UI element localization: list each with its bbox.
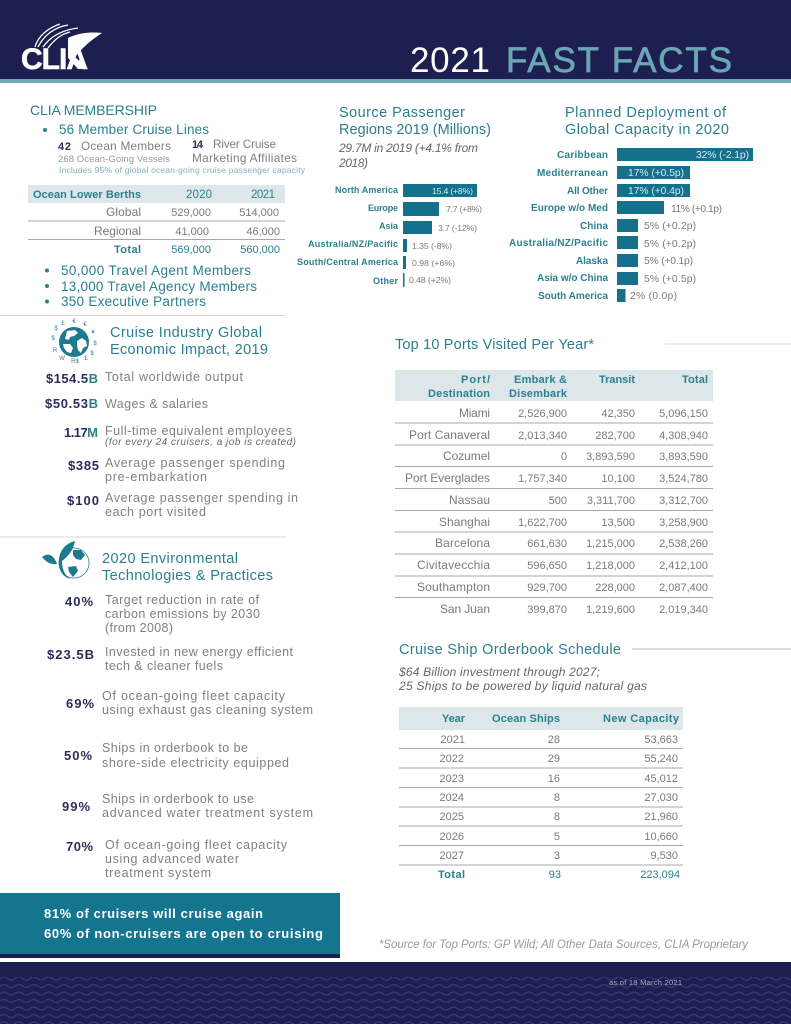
panel: environmental	[42, 541, 313, 880]
table rows: orderbook: 55,240	[644, 753, 678, 765]
table rows: ports: 929,700	[527, 582, 567, 594]
member cruise lines: Marketing Affiliates	[192, 151, 297, 165]
bar: Mediterranean: 17% (+0.5p)	[628, 168, 684, 179]
bar: Mediterranean: Mediterranean	[537, 168, 608, 179]
table rows: ports: 4,308,940	[659, 430, 708, 442]
callout: will cruise again: 60% of non-cruisers are open to cruising	[44, 926, 323, 941]
bar: Caribbean: 32% (-2.1p)	[696, 150, 749, 161]
member cruise lines	[43, 122, 306, 175]
heading: source passenger: Source Passenger	[339, 105, 465, 121]
table rows: ports: 2,526,900	[518, 408, 567, 420]
bar: Asia w/o China: Asia w/o China	[537, 273, 608, 284]
table rows: orderbook: 16	[548, 773, 560, 785]
table: ocean lower berths: Total	[114, 244, 141, 256]
stat: port spending: each port visited	[105, 505, 206, 519]
bar: Caribbean	[557, 148, 753, 161]
stat: port spending: $100	[67, 493, 99, 508]
stat: 69%: Of ocean-going fleet capacity	[102, 689, 286, 703]
bar: All Other	[567, 184, 690, 197]
stat: 50%: Ships in orderbook to be	[102, 741, 248, 755]
table rows: ports: Cozumel	[443, 449, 490, 463]
stat: 70%: using advanced water	[105, 852, 239, 866]
heading: planned deployment: Planned Deployment of	[565, 105, 727, 121]
table rows: ports: 3,524,780	[659, 473, 708, 485]
heading: top 10 ports: Top 10 Ports Visited Per Year*	[395, 337, 594, 353]
table header: ports: Disembark	[509, 388, 568, 400]
icon: globe with currency symbols: W	[59, 356, 65, 362]
table: ocean lower berths: 46,000	[246, 226, 280, 238]
heading: planned deployment: Global Capacity in 2020	[565, 122, 729, 138]
bar: Europe	[368, 202, 482, 216]
stat: pre-embarkation spending: $385	[68, 458, 99, 473]
stat: 69%: using exhaust gas cleaning system	[102, 703, 313, 717]
stat: pre-embarkation spending: Average passenger spending	[105, 456, 285, 470]
table rows: orderbook: 21,960	[644, 811, 678, 823]
bar: China: China	[580, 221, 608, 232]
stat: port spending	[67, 491, 298, 519]
bar: Asia	[379, 221, 477, 234]
table header: ports: Transit	[599, 374, 635, 386]
table header: orderbook: New Capacity	[603, 713, 680, 725]
table rows: orderbook: 2025	[440, 811, 464, 823]
callout: will cruise again: 81% of cruisers will cruise again	[44, 906, 263, 921]
table rows: orderbook: 28	[548, 734, 560, 746]
member cruise lines: 268 Ocean-Going Vessels	[58, 154, 170, 165]
bar: Alaska	[576, 254, 693, 267]
bar: Europe: Europe	[368, 203, 398, 213]
table rows: orderbook: 8	[554, 792, 560, 804]
table rows: ports: Shanghai	[439, 515, 490, 529]
table rows: ports: 596,650	[527, 560, 567, 572]
table rows: ports: 1,218,000	[586, 560, 635, 572]
table rows: ports: Barcelona	[435, 536, 490, 550]
panel: CLIA membership	[28, 102, 306, 309]
icon: globe with currency symbols: ¥	[91, 330, 95, 336]
table: ocean lower berths: 529,000	[171, 207, 211, 219]
icon: globe with currency symbols: $	[93, 341, 97, 347]
bar: Caribbean: Caribbean	[557, 150, 608, 161]
stat: 50%	[64, 741, 289, 770]
subtitle: source passenger: 29.7M in 2019 (+4.1% from	[338, 141, 478, 155]
stat: 40%	[65, 593, 260, 635]
table: ocean lower berths: 2021	[251, 189, 275, 201]
bar: Europe w/o Med: Europe w/o Med	[531, 203, 608, 214]
table rows: ports: 399,870	[527, 604, 567, 616]
logo: CLIA	[21, 24, 102, 76]
heading: environmental: 2020 Environmental	[102, 551, 238, 567]
table header: ports: Destination	[428, 388, 490, 400]
bar: North America: North America	[335, 185, 399, 195]
stat: wages: Wages & salaries	[105, 397, 208, 411]
bar: Asia w/o China	[537, 272, 696, 285]
table: ocean lower berths	[28, 185, 285, 256]
stat: employees: Full-time equivalent employees	[105, 424, 292, 438]
bar: Europe: 7.7 (+8%)	[446, 204, 482, 214]
stat: total output: $154.5B	[46, 371, 98, 386]
stat: employees: 1.17M	[64, 425, 98, 440]
member cruise lines: Includes 95% of global ocean-going cruise passenger capacity	[59, 165, 306, 175]
table rows: ports: 2,538,260	[659, 538, 708, 550]
heading: planned deployment	[565, 105, 729, 138]
heading: economic impact	[110, 325, 268, 358]
stat: port spending: Average passenger spending in	[105, 491, 298, 505]
stat: $23.5B: Invested in new energy efficient	[105, 645, 294, 659]
bar: Alaska: 5% (+0.1p)	[644, 256, 693, 267]
table rows: ports: 5,096,150	[659, 408, 708, 420]
member bullets: 350 Executive Partners	[61, 294, 206, 309]
table rows: orderbook: 3	[554, 850, 560, 862]
callout: will cruise again	[0, 893, 340, 958]
heading: source passenger: Regions 2019 (Millions)	[339, 122, 491, 138]
member cruise lines: 56 Member Cruise Lines	[59, 122, 209, 137]
table rows: ports: 13,500	[601, 517, 635, 529]
icon: globe with currency symbols: $	[90, 351, 94, 357]
stat: 99%: 99%	[62, 799, 90, 814]
bar: South/Central America	[297, 256, 455, 269]
table rows: ports: 661,630	[527, 538, 567, 550]
subtitle: orderbook: 25 Ships to be powered by liquid natural gas	[398, 679, 647, 693]
bar: Australia/NZ/Pacific: 1.35 (-8%)	[412, 241, 452, 251]
table rows: ports: 500	[549, 495, 567, 507]
icon: globe with currency symbols: $	[54, 326, 58, 332]
bar: South/Central America: 0.98 (+6%)	[412, 258, 455, 268]
heading: orderbook: Cruise Ship Orderbook Schedule	[399, 642, 621, 658]
table rows: ports: 42,350	[601, 408, 635, 420]
table rows: ports: 0	[561, 451, 567, 463]
title: 2021	[410, 41, 490, 80]
table header: ports: Total	[682, 374, 708, 386]
title: FAST FACTS	[506, 41, 732, 80]
bar: Mediterranean	[537, 166, 690, 179]
table rows: ports: San Juan	[440, 602, 490, 616]
table rows: ports	[395, 406, 713, 616]
table header: orderbook: Year	[442, 713, 466, 725]
table: ocean lower berths: 560,000	[240, 244, 280, 256]
table: cruise ship orderbook	[398, 642, 791, 881]
stat: 70%	[66, 838, 288, 880]
table header: ports: Port/	[461, 374, 490, 386]
bar: North America: 15.4 (+8%)	[432, 186, 473, 196]
table: top 10 ports	[395, 337, 791, 616]
heading: environmental: Technologies & Practices	[102, 568, 273, 584]
table: ocean lower berths: Regional	[94, 224, 141, 238]
table: ocean lower berths: 569,000	[171, 244, 211, 256]
stat: 50%: shore-side electricity equipped	[102, 756, 289, 770]
chart: source passenger regions	[297, 105, 491, 287]
bar: Other: 0.48 (+2%)	[409, 275, 451, 285]
member cruise lines: 42	[58, 141, 71, 153]
table rows: ports: 3,258,900	[659, 517, 708, 529]
bar: Australia/NZ/Pacific	[308, 239, 452, 252]
icon: globe with currency symbols: R$	[71, 359, 79, 365]
stat: wages: $50.53B	[45, 396, 98, 411]
stat: 69%: 69%	[66, 696, 94, 711]
stat: 70%: treatment system	[105, 866, 211, 880]
header banner	[0, 0, 791, 83]
icon: globe with currency symbols: €	[83, 322, 87, 328]
table rows: ports: 1,757,340	[518, 473, 567, 485]
source note: *Source for Top Ports: GP Wild; All Other Data Sources, CLIA Proprietary	[379, 939, 749, 951]
stat: 50%: 50%	[64, 748, 92, 763]
table rows: orderbook	[399, 734, 683, 881]
bar: Australia/NZ/Pacific: Australia/NZ/Pacific	[308, 239, 398, 249]
table rows: orderbook: 2022	[440, 753, 464, 765]
bar: Alaska: Alaska	[576, 256, 608, 267]
table rows: ports: 228,000	[595, 582, 635, 594]
table: ocean lower berths: 2020	[186, 189, 212, 201]
table rows: orderbook: 8	[554, 811, 560, 823]
table rows: ports: Southampton	[417, 580, 490, 594]
logo: CLIA: CLIA	[21, 43, 88, 76]
table rows: orderbook: 93	[549, 869, 561, 881]
bar: North America	[335, 184, 477, 197]
table: ocean lower berths: Global	[106, 205, 141, 219]
icon: globe with currency symbols: £	[61, 321, 65, 327]
stat: total output	[46, 370, 244, 386]
bar: Australia/NZ/Pacific: 5% (+0.2p)	[644, 239, 696, 250]
table rows: ports: 2,013,340	[518, 430, 567, 442]
table rows: ports: 1,622,700	[518, 517, 567, 529]
bar: All Other: All Other	[567, 186, 608, 197]
bar: Asia w/o China: 5% (+0.5p)	[644, 274, 696, 285]
stat: pre-embarkation spending: pre-embarkation	[105, 470, 207, 484]
subtitle: source passenger	[338, 141, 478, 170]
stat: 99%	[62, 792, 313, 820]
table rows: ports: Nassau	[449, 493, 490, 507]
bar: Europe w/o Med: 11% (+0.1p)	[671, 204, 722, 215]
bar: South America	[538, 289, 677, 302]
subtitle: orderbook	[398, 665, 647, 693]
member bullets: 13,000 Travel Agency Members	[61, 279, 257, 294]
icon: globe with currency symbols: $	[51, 336, 55, 342]
table rows: orderbook: 27,030	[644, 792, 678, 804]
table rows: ports: 3,893,590	[586, 451, 635, 463]
subtitle: source passenger: 2018)	[338, 156, 368, 170]
table rows: ports: 1,219,600	[586, 604, 635, 616]
stat: 70%: 70%	[66, 839, 93, 854]
member cruise lines: 14	[192, 139, 204, 151]
stat: 40%: (from 2008)	[105, 621, 173, 635]
bar: Europe w/o Med	[531, 201, 722, 215]
table: ocean lower berths: 41,000	[175, 226, 209, 238]
table rows: orderbook: 2023	[440, 773, 464, 785]
table rows: ports: 10,100	[601, 473, 635, 485]
table rows: ports: 3,311,700	[587, 495, 635, 507]
table rows: orderbook: 2024	[440, 792, 464, 804]
bar: All Other: 17% (+0.4p)	[628, 186, 684, 197]
table rows: ports: 3,893,590	[659, 451, 708, 463]
stat: 40%: 40%	[65, 594, 93, 609]
icon: globe with currency symbols: £	[84, 356, 88, 362]
table rows: orderbook: 29	[548, 753, 560, 765]
heading: source passenger	[339, 105, 491, 138]
stat: wages	[45, 396, 208, 411]
bar: Other	[373, 273, 451, 287]
stat: $23.5B	[47, 645, 294, 673]
stat: employees: (for every 24 cruisers, a job is created)	[105, 437, 296, 448]
bar: Asia: 3.7 (-12%)	[438, 223, 477, 233]
bar: South America: South America	[538, 291, 608, 302]
table rows: orderbook: 223,094	[640, 869, 680, 881]
table rows: ports: 282,700	[595, 430, 635, 442]
stat: 99%: Ships in orderbook to use	[102, 792, 254, 806]
table rows: orderbook: 9,530	[650, 850, 678, 862]
table rows: ports: 1,215,000	[586, 538, 635, 550]
table rows: ports: 2,019,340	[659, 604, 708, 616]
table rows: orderbook: 5	[554, 831, 560, 843]
table rows: orderbook: 10,660	[644, 831, 678, 843]
table rows: ports: 2,087,400	[659, 582, 708, 594]
stat: 40%: Target reduction in rate of	[105, 593, 260, 607]
heading: environmental	[102, 551, 273, 584]
table header: orderbook	[399, 707, 683, 730]
table rows: ports: Port Everglades	[405, 471, 490, 485]
bar: Asia: Asia	[379, 221, 399, 231]
table header: ports	[395, 370, 713, 401]
stat: pre-embarkation spending	[68, 456, 285, 484]
stat: $23.5B: tech & cleaner fuels	[105, 659, 223, 673]
footer banner	[0, 962, 791, 1024]
member cruise lines: River Cruise	[213, 137, 276, 151]
stat: 69%	[66, 689, 313, 717]
table rows: orderbook: 45,012	[644, 773, 678, 785]
member cruise lines: Ocean Members	[81, 139, 171, 153]
bar: China	[580, 219, 696, 232]
table rows: orderbook: 2021	[441, 734, 465, 746]
heading: economic impact: Economic Impact, 2019	[110, 342, 268, 358]
bar: Australia/NZ/Pacific	[509, 236, 696, 250]
panel: economic impact	[45, 319, 298, 519]
table rows: orderbook: Total	[438, 869, 465, 881]
table rows: orderbook: 2026	[440, 831, 464, 843]
heading: CLIA membership: CLIA MEMBERSHIP	[30, 102, 157, 118]
table rows: ports: Civitavecchia	[417, 558, 490, 572]
member bullets: 50,000 Travel Agent Members	[61, 263, 251, 278]
table header: orderbook: Ocean Ships	[492, 713, 560, 725]
stat: employees	[64, 424, 296, 448]
table: ocean lower berths: Ocean Lower Berths	[33, 189, 141, 201]
table rows: ports: 3,312,700	[659, 495, 708, 507]
stat: total output: Total worldwide output	[105, 370, 244, 384]
table: ocean lower berths: 514,000	[239, 207, 279, 219]
chart: planned deployment	[509, 105, 753, 302]
table rows: orderbook: 53,663	[644, 734, 678, 746]
member bullets	[45, 263, 257, 309]
icon: globe with currency symbols: R	[53, 348, 58, 354]
icon: globe with leaves	[42, 541, 89, 579]
date note: as of 18 March 2021	[609, 978, 682, 987]
bar: South America: 2% (0.0p)	[630, 291, 677, 302]
table rows: orderbook: 2027	[440, 850, 464, 862]
icon: globe with currency symbols: €	[72, 319, 76, 325]
bar: China: 5% (+0.2p)	[644, 221, 696, 232]
table header: ports: Embark &	[514, 374, 567, 386]
stat: 70%: Of ocean-going fleet capacity	[105, 838, 288, 852]
stat: $23.5B: $23.5B	[47, 647, 94, 662]
stat: 99%: advanced water treatment system	[102, 806, 313, 820]
table rows: ports: 2,412,100	[659, 560, 708, 572]
subtitle: orderbook: $64 Billion investment through 2027;	[398, 665, 600, 679]
icon: globe with currency symbols	[51, 319, 97, 365]
table rows: ports: Port Canaveral	[409, 428, 490, 442]
bar: South/Central America: South/Central America	[297, 257, 399, 267]
bar: Other: Other	[373, 276, 398, 286]
bar: Australia/NZ/Pacific: Australia/NZ/Pacific	[509, 238, 608, 249]
heading: economic impact: Cruise Industry Global	[110, 325, 262, 341]
stat: 40%: carbon emissions by 2030	[105, 607, 260, 621]
table rows: ports: Miami	[459, 406, 490, 420]
